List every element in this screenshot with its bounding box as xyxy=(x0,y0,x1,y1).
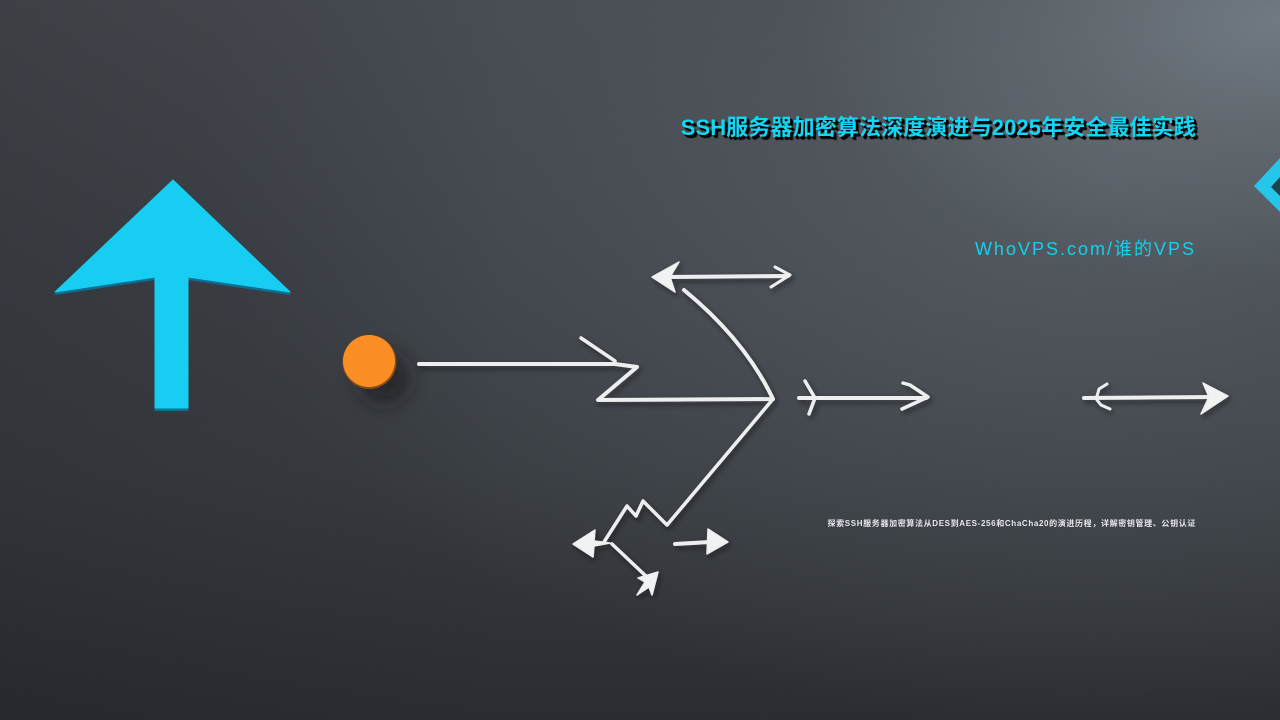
title: SSH服务器加密算法深度演进与2025年安全最佳实践 xyxy=(681,115,1196,140)
arrow: top double-headed xyxy=(652,262,790,292)
branching white arrow network xyxy=(419,262,1228,595)
arrow: far right double-headed xyxy=(1084,383,1228,414)
subtitle: site name: WhoVPS.com/谁的VPS xyxy=(975,239,1196,259)
icon: diamond outline at right edge xyxy=(1254,158,1280,212)
arrow: lower diagonal xyxy=(612,544,658,595)
description text: 探索SSH服务器加密算法从DES到AES-256和ChaCha20的演进历程，详解密钥管理、公钥认证 xyxy=(828,519,1196,528)
arrow: lower right xyxy=(675,529,728,554)
icon: cyan up arrow xyxy=(55,180,290,410)
arrow: middle right feathered xyxy=(799,381,928,414)
arrow: lower left xyxy=(573,530,610,557)
arrow: main branching path xyxy=(419,290,773,542)
icon: orange dot xyxy=(342,335,410,404)
